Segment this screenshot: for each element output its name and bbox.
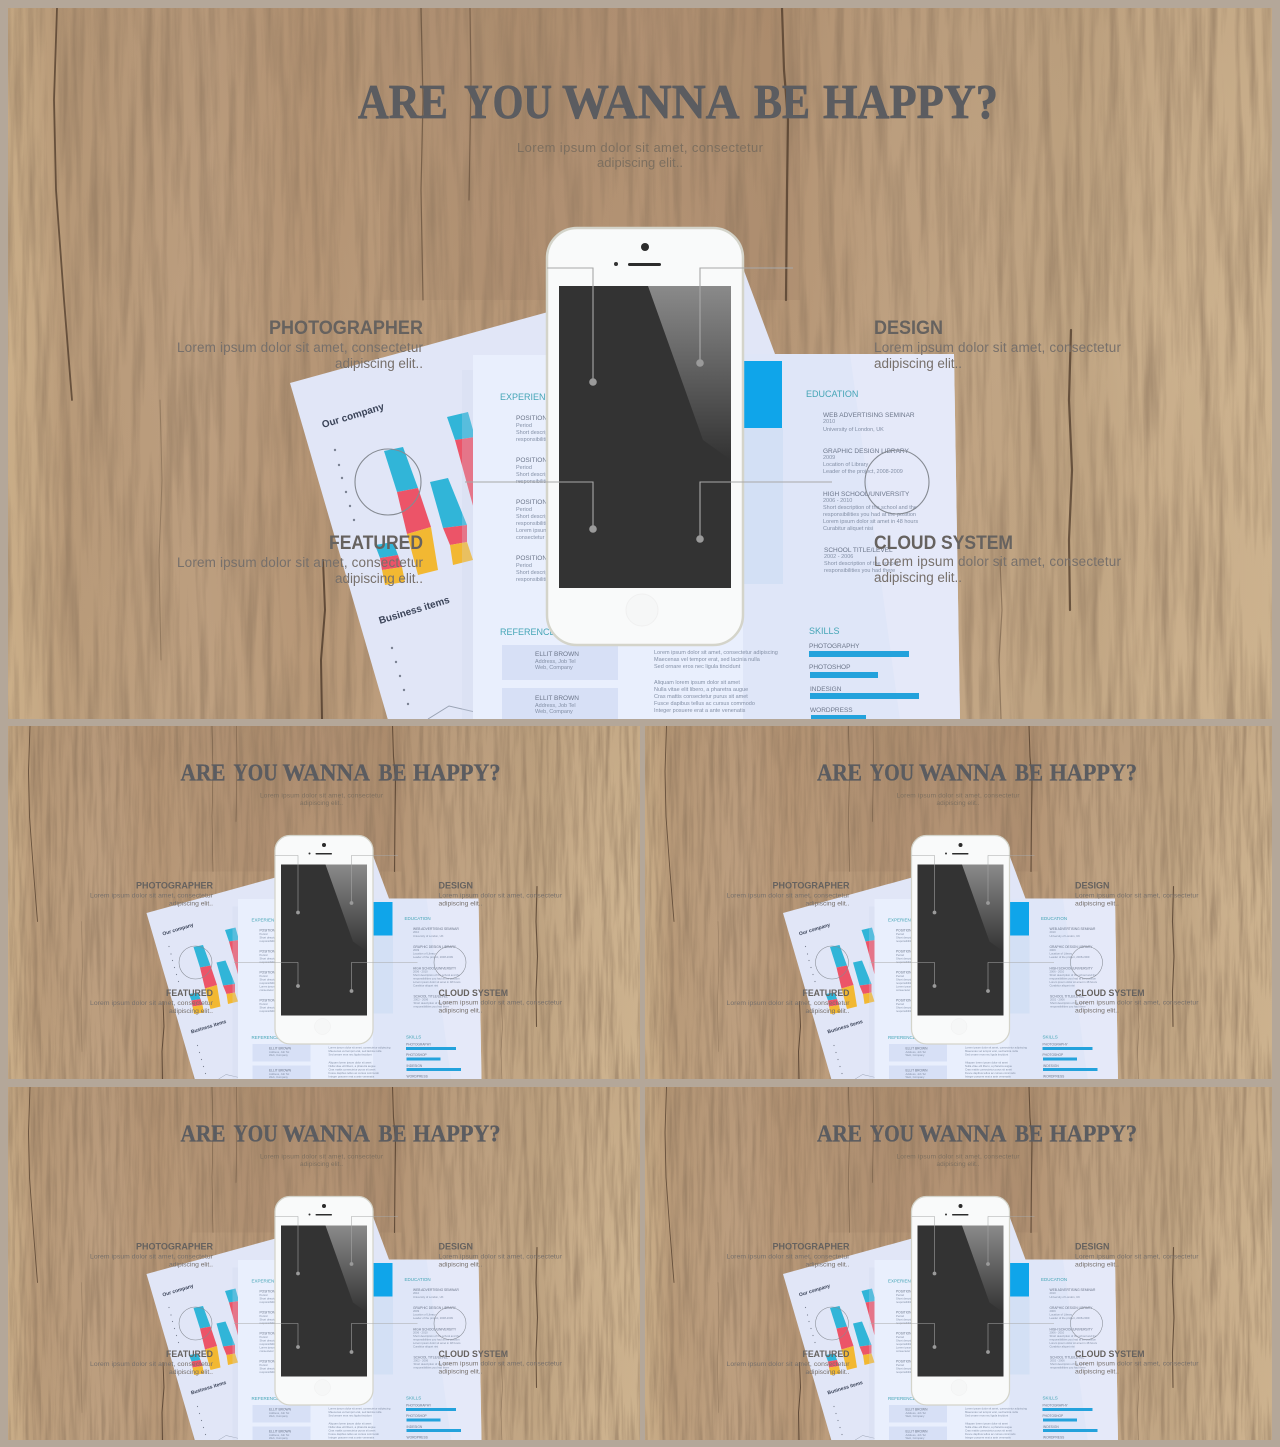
callout: cloud system: adipiscing elit.. (1075, 1008, 1119, 1014)
callout: cloud system (1075, 1349, 1199, 1376)
wood background (2, 1082, 642, 1442)
title: BE (754, 74, 810, 129)
callout: photographer: Lorem ipsum dolor sit amet, consectetur (177, 340, 424, 355)
callout: cloud system: CLOUD SYSTEM (874, 533, 1013, 554)
callout: cloud system: Lorem ipsum dolor sit amet, consectetur (1075, 1000, 1199, 1006)
title: HAPPY? (413, 760, 500, 786)
callout: featured: adipiscing elit.. (806, 1008, 850, 1015)
callout: design: Lorem ipsum dolor sit amet, consectetur (1075, 892, 1199, 900)
panel: main slide (0, 0, 1280, 720)
title: YOU (234, 1120, 278, 1148)
title: WANNA (919, 1120, 1007, 1148)
callout: cloud system: adipiscing elit.. (1075, 1368, 1119, 1376)
callout: design (1075, 1242, 1199, 1268)
subtitle (260, 792, 384, 807)
callout: photographer: Lorem ipsum dolor sit amet, consectetur (726, 1254, 850, 1260)
phone mockup (547, 228, 743, 645)
title: BE (1015, 760, 1043, 786)
callout: photographer: adipiscing elit.. (806, 900, 850, 908)
documents (146, 852, 482, 1082)
connector lines (816, 1216, 1102, 1354)
documents (146, 1212, 482, 1442)
title: YOU (870, 1120, 914, 1148)
phone mockup (912, 1196, 1010, 1405)
title: WANNA (919, 760, 1007, 786)
wood background (2, 722, 642, 1082)
callout: design: DESIGN (438, 880, 473, 892)
subtitle (896, 1154, 1020, 1168)
callout: cloud system: adipiscing elit.. (438, 1008, 483, 1014)
callout: featured: Lorem ipsum dolor sit amet, consectetur (726, 1000, 850, 1007)
panel: thumbnail bottom left (2, 1082, 642, 1442)
callout: cloud system: CLOUD SYSTEM (1075, 1349, 1145, 1360)
callout: cloud system: CLOUD SYSTEM (1075, 988, 1145, 999)
callout: cloud system (874, 533, 1122, 585)
callout: photographer (177, 318, 424, 371)
callout: cloud system: Lorem ipsum dolor sit amet, consectetur (1075, 1360, 1199, 1368)
callout: design: DESIGN (874, 318, 943, 339)
callout: photographer (726, 1242, 850, 1268)
wood background (638, 1082, 1278, 1442)
documents (783, 1212, 1118, 1442)
callout: featured: FEATURED (166, 988, 213, 999)
title: BE (378, 760, 406, 786)
title: YOU (870, 760, 914, 786)
panel: thumbnail bottom right (638, 1082, 1278, 1442)
callout: cloud system: Lorem ipsum dolor sit amet, consectetur (438, 1000, 563, 1006)
connector lines and markers (355, 268, 929, 543)
phone mockup (275, 1196, 373, 1405)
callout: design: Lorem ipsum dolor sit amet, consectetur (1075, 1254, 1199, 1260)
phone mockup (912, 836, 1010, 1044)
callout: photographer (90, 1242, 214, 1268)
subtitle: Lorem ipsum dolor sit amet, consectetur (260, 792, 384, 800)
callout: featured: Lorem ipsum dolor sit amet, consectetur (90, 1000, 214, 1007)
callout: featured (90, 1349, 214, 1376)
callout: design: adipiscing elit.. (438, 900, 483, 908)
callout: featured (177, 533, 424, 586)
callout: featured: Lorem ipsum dolor sit amet, consectetur (90, 1361, 214, 1368)
callout: photographer: PHOTOGRAPHER (772, 1242, 850, 1252)
title: HAPPY? (823, 74, 998, 129)
phone mockup (275, 836, 373, 1044)
subtitle: Lorem ipsum dolor sit amet, consectetur (260, 1154, 384, 1160)
title: YOU (464, 74, 552, 129)
callout: featured: Lorem ipsum dolor sit amet, consectetur (726, 1361, 850, 1368)
callout: photographer: PHOTOGRAPHER (269, 318, 423, 339)
title: HAPPY? (1050, 760, 1137, 786)
title: YOU (234, 760, 278, 786)
title: ARE (358, 74, 448, 129)
subtitle: adipiscing elit.. (936, 800, 980, 807)
callout: design (1075, 880, 1199, 908)
documents with charts and resume (290, 260, 960, 720)
callout: featured: adipiscing elit.. (169, 1369, 213, 1376)
title: ARE (180, 760, 226, 786)
wood background (0, 0, 1280, 720)
subtitle (260, 1154, 384, 1168)
title: WANNA (282, 1120, 370, 1148)
wood background (638, 722, 1278, 1082)
title: WANNA (282, 760, 370, 786)
callout: featured (726, 988, 850, 1015)
callout: photographer: adipiscing elit.. (169, 900, 213, 908)
title: HAPPY? (413, 1120, 500, 1148)
callout: photographer: PHOTOGRAPHER (136, 1242, 213, 1252)
title: ARE (180, 1120, 226, 1148)
panel: thumbnail top left (2, 722, 642, 1082)
callout: featured: adipiscing elit.. (169, 1008, 213, 1015)
subtitle: adipiscing elit.. (597, 155, 683, 170)
callout: photographer: adipiscing elit.. (806, 1262, 850, 1268)
callout: featured: FEATURED (802, 1349, 850, 1360)
title: BE (1015, 1120, 1043, 1148)
subtitle: Lorem ipsum dolor sit amet, consectetur (896, 792, 1020, 800)
title: ARE (817, 1120, 862, 1148)
callout: featured (726, 1349, 850, 1376)
callout: photographer: Lorem ipsum dolor sit amet, consectetur (726, 892, 850, 900)
callout: design: adipiscing elit.. (874, 356, 962, 371)
callout: featured: FEATURED (329, 533, 423, 554)
callout: photographer: Lorem ipsum dolor sit amet, consectetur (90, 892, 214, 900)
callout: design: DESIGN (438, 1242, 473, 1252)
callout: featured: FEATURED (802, 988, 850, 999)
subtitle: Lorem ipsum dolor sit amet, consectetur (517, 140, 764, 155)
documents (783, 852, 1118, 1082)
callout: design: Lorem ipsum dolor sit amet, consectetur (874, 340, 1122, 355)
callout: design (874, 318, 1122, 371)
callout: design: adipiscing elit.. (1075, 900, 1119, 908)
callout: photographer (726, 880, 850, 908)
callout: design: DESIGN (1075, 1242, 1110, 1252)
callout: photographer: Lorem ipsum dolor sit amet, consectetur (90, 1254, 214, 1260)
callout: featured: Lorem ipsum dolor sit amet, consectetur (177, 555, 424, 570)
callout: design: adipiscing elit.. (1075, 1262, 1119, 1268)
callout: featured: FEATURED (166, 1349, 213, 1360)
callout: photographer: adipiscing elit.. (335, 356, 423, 371)
callout: design: Lorem ipsum dolor sit amet, consectetur (438, 892, 563, 900)
callout: cloud system: Lorem ipsum dolor sit amet, consectetur (438, 1360, 563, 1368)
connector lines (179, 1216, 466, 1354)
callout: photographer: PHOTOGRAPHER (772, 880, 850, 892)
title: BE (378, 1120, 406, 1148)
subtitle: adipiscing elit.. (936, 1161, 980, 1168)
callout: featured: adipiscing elit.. (806, 1369, 850, 1376)
callout: design: Lorem ipsum dolor sit amet, consectetur (438, 1254, 563, 1260)
subtitle (896, 792, 1020, 807)
callout: photographer (90, 880, 214, 908)
callout: featured: adipiscing elit.. (335, 571, 423, 586)
callout: cloud system: CLOUD SYSTEM (438, 988, 508, 999)
connector lines (816, 856, 1102, 993)
callout: photographer: PHOTOGRAPHER (136, 880, 213, 892)
title: HAPPY? (1050, 1120, 1137, 1148)
title: ARE (817, 760, 862, 786)
callout: design (438, 880, 563, 908)
callout: cloud system: adipiscing elit.. (874, 570, 962, 585)
callout: design (438, 1242, 563, 1268)
callout: cloud system: Lorem ipsum dolor sit amet, consectetur (874, 554, 1122, 569)
callout: cloud system (1075, 988, 1199, 1014)
callout: photographer: adipiscing elit.. (169, 1262, 213, 1268)
callout: featured (90, 988, 214, 1015)
callout: cloud system: CLOUD SYSTEM (438, 1349, 508, 1360)
callout: cloud system (438, 1349, 563, 1376)
callout: design: DESIGN (1075, 880, 1110, 892)
panel: thumbnail top right (638, 722, 1278, 1082)
callout: cloud system: adipiscing elit.. (438, 1368, 483, 1376)
title: WANNA (562, 74, 740, 129)
callout: cloud system (438, 988, 563, 1014)
callout: design: adipiscing elit.. (438, 1262, 483, 1268)
subtitle: adipiscing elit.. (300, 1161, 343, 1168)
subtitle: Lorem ipsum dolor sit amet, consectetur (896, 1154, 1020, 1160)
connector lines (179, 856, 466, 993)
subtitle: adipiscing elit.. (300, 800, 343, 807)
subtitle (518, 142, 763, 170)
